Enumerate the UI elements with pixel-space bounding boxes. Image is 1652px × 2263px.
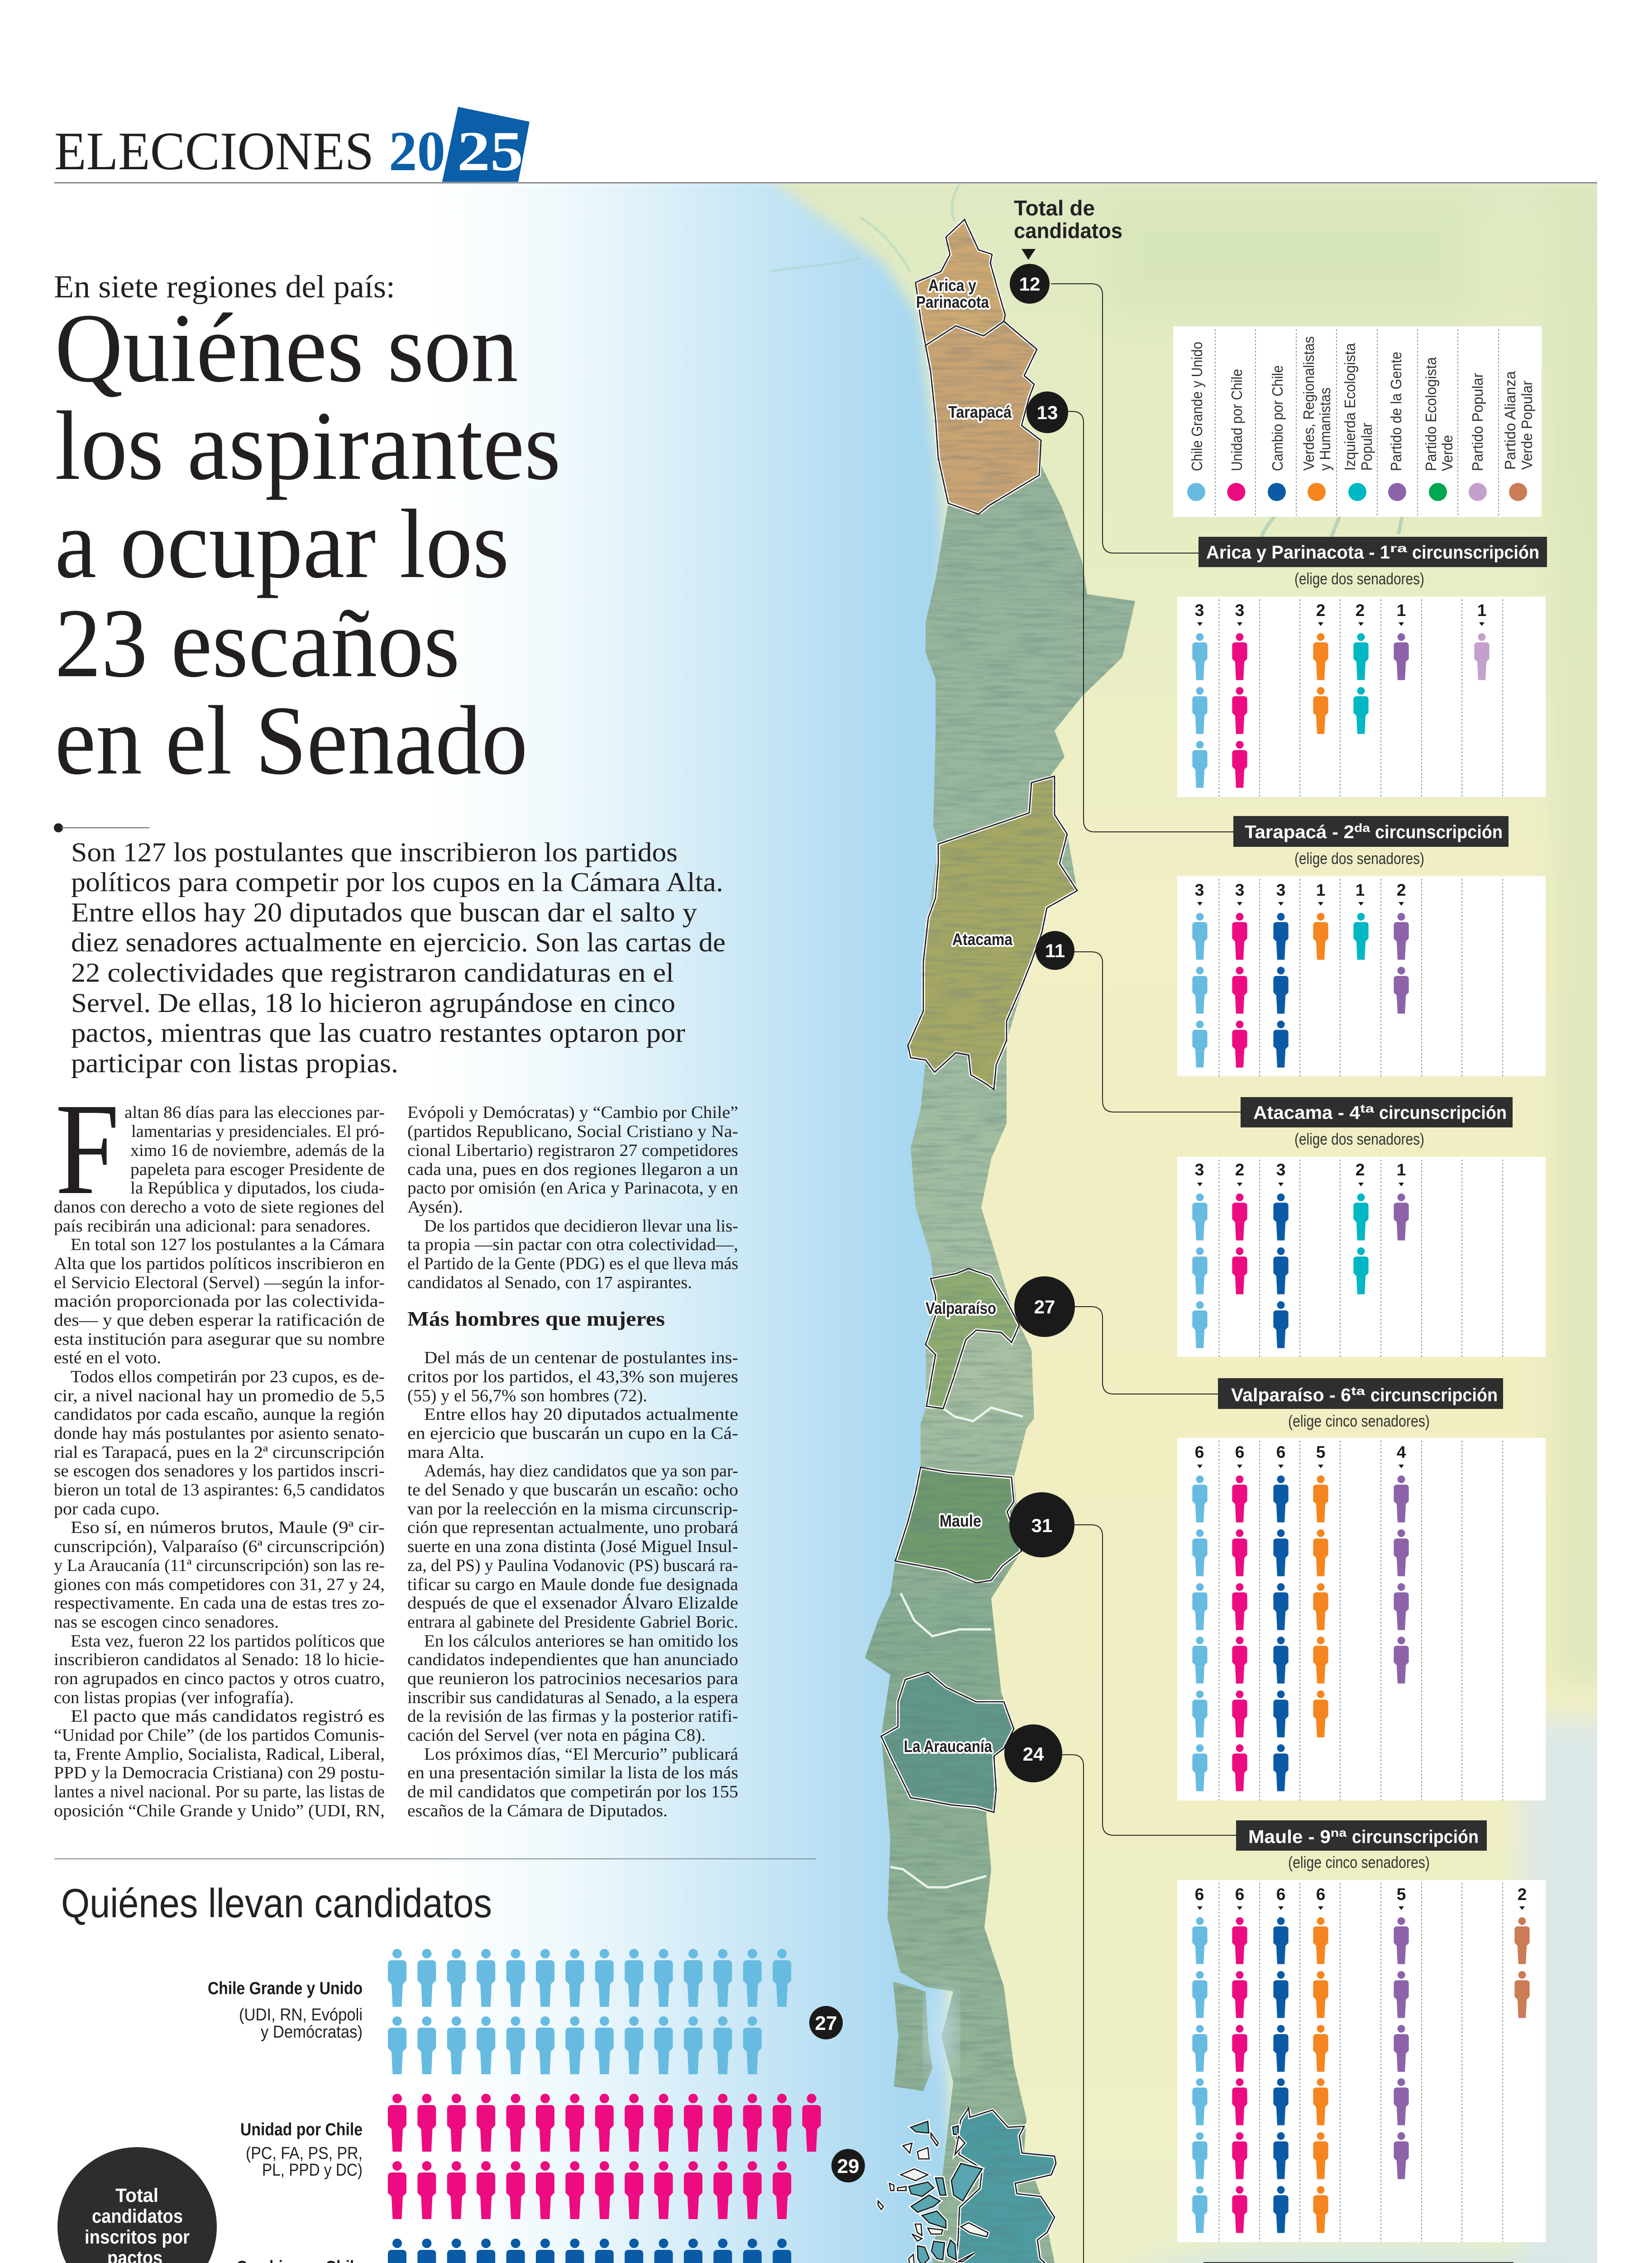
body text column 2: tificar su cargo en Maule donde fue designada — [407, 1575, 738, 1594]
title: 23 escaños — [55, 589, 460, 698]
body text column 2: Entre ellos hay 20 diputados actualmente — [424, 1405, 738, 1424]
body text column 2: critos por los partidos, el 43,3% son mujeres — [407, 1367, 738, 1386]
header: Atacama 4ta circunscripción — [1241, 1097, 1513, 1127]
body text column 2: entrara al gabinete del Presidente Gabriel Boric. — [407, 1613, 738, 1632]
badge: 11 Atacama — [1036, 931, 1074, 970]
body text column 1: esté en el voto. — [54, 1348, 161, 1367]
panel: Maule candidates: 6 — [1235, 1885, 1244, 1904]
pact label: Unidad por Chile: Unidad por Chile — [240, 2120, 363, 2139]
drop cap: F — [55, 1076, 119, 1222]
badge: 11 Atacama: 11 — [1045, 940, 1065, 961]
region name labels: Valparaíso — [926, 1299, 996, 1318]
body text column 1: inscribieron candidatos al Senado: 18 lo hicie- — [54, 1650, 385, 1669]
pictogram: Chile Grande y Unido 27 — [388, 1949, 791, 2074]
body text column 2: candidatos independientes que han anunciado — [407, 1650, 738, 1669]
header: Tarapacá 2da circunscripción — [1233, 816, 1509, 847]
label: Total de candidatos with arrow: Total de — [1014, 196, 1095, 220]
panel: Tarapacá candidates: 1 — [1316, 881, 1325, 899]
body text column 1: Eso sí, en números brutos, Maule (9ª cir- — [71, 1518, 385, 1537]
map: Chile mainland silhouette — [865, 462, 1239, 2263]
header: Tarapacá 2da circunscripción: circunscripción — [1375, 821, 1503, 842]
intro paragraph: políticos para competir por los cupos en la Cámara Alta. — [71, 867, 723, 897]
body text column 1: respectivamente. En cada una de estas tres zo- — [54, 1594, 385, 1613]
header: La Araucanía 11a circunscripción — [1203, 2262, 1514, 2263]
badge: 31 Maule — [1009, 1492, 1074, 1557]
region name labels: Maule — [940, 1512, 981, 1530]
region name labels: Arica y — [928, 276, 976, 295]
note: elige dos senadores: (elige dos senadores) — [1294, 569, 1424, 588]
intro paragraph: Son 127 los postulantes que inscribieron los partidos — [71, 837, 678, 867]
header: Atacama 4ta circunscripción: circunscripción — [1379, 1102, 1507, 1123]
body text column 1: papeleta para escoger Presidente de — [130, 1160, 385, 1179]
body text column 2: Los próximos días, “El Mercurio” publicará — [424, 1745, 738, 1764]
badge: 27 Valparaíso: 27 — [1034, 1296, 1055, 1318]
body text column 1: país recibirán una adicional: para senadores. — [54, 1217, 371, 1236]
map: fjords, lakes and internal boundaries — [890, 1408, 1223, 2263]
region: Aysén with archipelago — [877, 2108, 1056, 2263]
body text column 2: mara Alta. — [407, 1443, 484, 1462]
panel: Atacama candidates: 2 — [1356, 1160, 1365, 1179]
region name labels: La Araucanía — [904, 1737, 992, 1756]
region name labels: Atacama — [952, 930, 1012, 949]
body text column 1: nas se escogen cinco senadores. — [54, 1613, 279, 1632]
body text column 2: (55) y el 56,7% son hombres (72). — [407, 1386, 647, 1405]
region name labels: Parinacota — [916, 293, 989, 311]
body text column 1 — [54, 1103, 385, 1820]
body text column 1: mación proporcionada por las colectivida- — [54, 1292, 385, 1311]
body text column 2 — [407, 1103, 738, 1820]
body text column 1: esta institución para asegurar que su nombre — [54, 1330, 385, 1349]
body text column 2: en ejercicio que buscarán un cupo en la Cá- — [407, 1424, 738, 1443]
body text column 2: de mil candidatos que competirán por los 155 — [407, 1782, 738, 1801]
body text column 2: después de que el exsenador Álvaro Elizalde — [407, 1594, 738, 1613]
body text column 1: ron agrupados en cinco pactos y otros cuatro, — [54, 1669, 385, 1688]
body text column 1: el Servicio Electoral (Servel) —según la infor- — [54, 1273, 385, 1292]
intro paragraph: participar con listas propias. — [71, 1048, 398, 1078]
panel: Valparaíso candidates — [1177, 1438, 1546, 1800]
panel: Maule candidates: 6 — [1195, 1885, 1204, 1904]
body text column 2: Más hombres que mujeres — [407, 1308, 665, 1330]
legend panel: parties and colours: Unidad por Chile — [1228, 369, 1245, 471]
pact label: Chile Grande y Unido: Chile Grande y Unido — [208, 1979, 363, 1998]
badge: 29: 29 — [837, 2155, 859, 2177]
header: Maule 9na circunscripción — [1236, 1820, 1487, 1851]
body text column 1: cunscripción), Valparaíso (6ª circunscripción) — [54, 1537, 385, 1556]
body text column 2: el Partido de la Gente (PDG) es el que lleva más — [407, 1254, 738, 1273]
panel: Maule candidates: 6 — [1276, 1885, 1285, 1904]
body text column 1: con listas propias (ver infografía). — [54, 1688, 294, 1707]
kicker: En siete regiones del país: — [54, 269, 395, 305]
title — [55, 294, 561, 795]
body text column 1: rial es Tarapacá, pues en la 2ª circunscripción — [54, 1443, 385, 1462]
header: Arica y Parinacota 1ra circunscripción: ra — [1390, 541, 1408, 555]
header: Atacama 4ta circunscripción: Atacama - 4 — [1253, 1102, 1360, 1123]
body text column 2: pacto por omisión (en Arica y Parinacota, y en — [407, 1179, 738, 1198]
body text column 1: la República y diputados, los ciuda- — [130, 1179, 385, 1198]
pictogram: Unidad por Chile 29 — [388, 2094, 821, 2219]
panel: Tarapacá candidates — [1177, 876, 1546, 1076]
panel: Maule candidates: 2 — [1518, 1885, 1527, 1904]
body text column 1: “Unidad por Chile” (de los partidos Comunis- — [54, 1726, 385, 1745]
panel: Valparaíso candidates: 5 — [1316, 1443, 1325, 1461]
note: elige cinco senadores: (elige cinco senadores) — [1288, 1412, 1430, 1430]
circle: total candidatos inscritos por pactos: Total — [115, 2185, 158, 2206]
panel: Atacama candidates: 3 — [1195, 1160, 1204, 1179]
header: Elecciones 2025: 25 — [457, 120, 523, 183]
legend panel: parties and colours: Verdes, Regionalistas — [1300, 336, 1317, 471]
body text column 2: escaños de la Cámara de Diputados. — [407, 1801, 668, 1820]
pact label: Chile Grande y Unido: (UDI, RN, Evópoli — [239, 2005, 363, 2024]
body text column 1: bieron un total de 13 aspirantes: 6,5 candidatos — [54, 1480, 385, 1499]
header: Elecciones 2025: ELECCIONES — [54, 121, 374, 181]
legend panel: parties and colours: Izquierda Ecologista — [1342, 343, 1358, 471]
panel: Tarapacá candidates: 3 — [1276, 881, 1285, 899]
badge: 31 Maule: 31 — [1031, 1515, 1052, 1536]
region: Valparaíso — [926, 1269, 1019, 1408]
panel: Arica y Parinacota candidates: 2 — [1356, 601, 1365, 620]
circle: total candidatos inscritos por pactos: inscritos por — [85, 2226, 190, 2248]
badge: 12 Arica — [1010, 264, 1050, 304]
title: los aspirantes — [55, 391, 561, 501]
note: elige dos senadores: (elige dos senadores) — [1294, 849, 1424, 868]
panel: Atacama candidates — [1177, 1157, 1546, 1357]
body text column 1: lamentarias y presidenciales. El pró- — [131, 1122, 385, 1141]
intro paragraph — [71, 837, 726, 1078]
badge: 27: 27 — [815, 2012, 837, 2034]
body text column 1: danos con derecho a voto de siete regiones del — [54, 1198, 385, 1217]
panel: Arica y Parinacota candidates — [1177, 597, 1546, 797]
header: Arica y Parinacota 1ra circunscripción — [1198, 537, 1547, 567]
header: Atacama 4ta circunscripción: ta — [1360, 1102, 1375, 1115]
panel: Valparaíso candidates: 6 — [1235, 1443, 1244, 1461]
body text column 1: ta, Frente Amplio, Socialista, Radical, Liberal, — [54, 1745, 385, 1764]
header: Valparaíso 6ta circunscripción: circunscripción — [1370, 1385, 1498, 1405]
legend panel: parties and colours: Verde Popular — [1518, 381, 1535, 470]
panel: Atacama candidates: 3 — [1276, 1160, 1285, 1179]
panel: Arica y Parinacota candidates: 3 — [1235, 601, 1244, 620]
header: Arica y Parinacota 1ra circunscripción: Arica y Parinacota - 1 — [1206, 542, 1390, 563]
body text column 2: cional Libertario) registraron 27 competidores — [407, 1141, 738, 1160]
panel: Valparaíso candidates: 6 — [1195, 1443, 1204, 1461]
panel: Valparaíso candidates: 6 — [1276, 1443, 1285, 1461]
legend panel: parties and colours: Partido Popular — [1469, 373, 1486, 471]
body text column 1: lantes a nivel nacional. Por su parte, las listas de — [54, 1782, 385, 1801]
panel: Tarapacá candidates: 1 — [1356, 881, 1365, 899]
header: Maule 9na circunscripción: Maule - 9 — [1248, 1826, 1331, 1847]
header: Valparaíso 6ta circunscripción — [1218, 1378, 1503, 1409]
badge: 29 — [831, 2149, 865, 2182]
note: elige dos senadores: (elige dos senadores) — [1294, 1130, 1424, 1148]
body text column 2: suerte en una zona distinta (José Miguel Insul- — [407, 1537, 738, 1556]
body text column 1: altan 86 días para las elecciones par- — [124, 1103, 385, 1122]
panel: Arica y Parinacota candidates: 2 — [1316, 601, 1325, 620]
panel: Arica y Parinacota candidates: 1 — [1477, 601, 1486, 620]
body text column 2: candidatos al Senado, con 17 aspirantes. — [407, 1273, 692, 1292]
body text column 1: Todos ellos competirán por 23 cupos, es de- — [71, 1367, 385, 1386]
legend panel: parties and colours: Cambio por Chile — [1269, 365, 1286, 471]
badge: 12 Arica: 12 — [1019, 273, 1040, 295]
circle: total candidatos inscritos por pactos: candidatos — [92, 2206, 183, 2227]
intro paragraph: pactos, mientras que las cuatro restantes optaron por — [71, 1018, 685, 1048]
panel: Tarapacá candidates: 2 — [1397, 881, 1406, 899]
region name labels — [904, 276, 1017, 2263]
header: Tarapacá 2da circunscripción: Tarapacá - 2 — [1245, 821, 1354, 842]
body text column 2: inscribir sus candidaturas al Senado, a la espera — [407, 1688, 738, 1707]
body text column 1: des— y que deben esperar la ratificación de — [54, 1311, 385, 1330]
body text column 2: Además, hay diez candidatos que ya son par- — [424, 1461, 738, 1480]
heading: Quiénes llevan candidatos: Quiénes llevan candidatos — [61, 1881, 492, 1926]
body text column 1: se escogen dos senadores y los partidos inscri- — [54, 1461, 385, 1480]
legend panel: parties and colours: y Humanistas — [1317, 387, 1333, 471]
title: a ocupar los — [55, 490, 509, 599]
region: Tarapacá — [926, 321, 1041, 514]
pact label: Chile Grande y Unido: y Demócratas) — [261, 2023, 363, 2042]
badge: 24 La Araucanía: 24 — [1023, 1743, 1044, 1765]
badge: 24 La Araucanía — [1004, 1724, 1062, 1782]
header: Maule 9na circunscripción: na — [1331, 1826, 1347, 1839]
leader lines from regions to panels — [1051, 284, 1241, 2263]
body text column 2: Del más de un centenar de postulantes ins- — [424, 1348, 738, 1367]
legend panel: parties and colours — [1173, 326, 1542, 517]
body text column 2: za, del PS) y Paulina Vodanovic (PS) buscará ra- — [407, 1556, 738, 1575]
title: Quiénes son — [55, 294, 518, 403]
body text column 1: ximo 16 de noviembre, además de la — [130, 1141, 385, 1160]
panel: Atacama candidates: 2 — [1235, 1160, 1244, 1179]
panel: Tarapacá candidates: 3 — [1235, 881, 1244, 899]
header: Valparaíso 6ta circunscripción: Valparaíso - 6 — [1231, 1385, 1351, 1405]
legend panel: parties and colours: Partido Alianza — [1502, 371, 1518, 470]
region: Arica y Parinacota — [916, 220, 1005, 345]
title: en el Senado — [55, 686, 528, 795]
body text column 1: Alta que los partidos políticos inscribieron en — [54, 1254, 385, 1273]
header: Arica y Parinacota 1ra circunscripción: circunscripción — [1412, 542, 1539, 563]
body text column 1: giones con más competidores con 31, 27 y 24, — [54, 1575, 385, 1594]
body text column 2: de la revisión de las firmas y la posterior ratifi- — [407, 1707, 738, 1726]
panel: Maule candidates — [1177, 1880, 1546, 2242]
legend panel: parties and colours: Chile Grande y Unido — [1189, 342, 1205, 471]
map: watercolor background of Chile — [498, 184, 1597, 2263]
pact label: Unidad por Chile: PL, PPD y DC) — [262, 2161, 363, 2180]
label: Total de candidatos with arrow: candidatos — [1014, 219, 1122, 243]
intro paragraph: Servel. De ellas, 18 lo hicieron agrupándose en cinco — [71, 988, 675, 1018]
panel: Maule candidates: 6 — [1316, 1885, 1325, 1904]
legend panel: parties and colours: Partido Ecologista — [1423, 357, 1439, 471]
panel: Atacama candidates: 1 — [1397, 1160, 1406, 1179]
body text column 1: cir, a nivel nacional hay un promedio de 5,5 — [54, 1386, 385, 1405]
label: Total de candidatos with arrow — [1014, 196, 1122, 260]
header: Elecciones 2025 — [54, 107, 1597, 183]
pact label: Unidad por Chile: (PC, FA, PS, PR, — [246, 2144, 363, 2163]
header: Valparaíso 6ta circunscripción: ta — [1351, 1384, 1366, 1398]
pictogram: Cambio por Chile 27 — [388, 2239, 791, 2263]
pact label: Chile Grande y Unido — [208, 1979, 363, 2042]
legend panel: parties and colours: Partido de la Gente — [1388, 352, 1404, 471]
intro marker — [54, 823, 149, 832]
circle: total candidatos inscritos por pactos — [57, 2147, 217, 2263]
region: La Araucanía — [881, 1672, 1014, 1812]
body text column 2: ta propia —sin pactar con otra colectividad—, — [407, 1235, 738, 1254]
body text column 1: oposición “Chile Grande y Unido” (UDI, RN, — [54, 1801, 385, 1820]
body text column 1: El pacto que más candidatos registró es — [71, 1707, 385, 1726]
panel: Arica y Parinacota candidates: 3 — [1195, 601, 1204, 620]
body text column 1: y La Araucanía (11ª circunscripción) son las re- — [54, 1556, 385, 1575]
body text column 2: en una presentación similar la lista de los más — [407, 1763, 738, 1782]
body text column 2: cada una, pues en dos regiones llegaron a un — [407, 1160, 738, 1179]
intro paragraph: 22 colectividades que registraron candidaturas en el — [71, 958, 674, 988]
header: Tarapacá 2da circunscripción: da — [1354, 821, 1370, 835]
body text column 1: En total son 127 los postulantes a la Cámara — [71, 1235, 385, 1254]
body text column 2: te del Senado y que buscarán un escaño: ocho — [407, 1480, 738, 1499]
pact label: Unidad por Chile — [240, 2120, 363, 2180]
body text column 2: que reunieron los patrocinios necesarios para — [407, 1669, 738, 1688]
intro paragraph: Entre ellos hay 20 diputados que buscan dar el salto y — [71, 898, 697, 927]
body text column 2: Evópoli y Demócratas) y “Cambio por Chile” — [407, 1103, 738, 1122]
badge: 27 Valparaíso — [1014, 1276, 1075, 1337]
body text column 2: (partidos Republicano, Social Cristiano y Na- — [407, 1122, 738, 1141]
panel: Arica y Parinacota candidates: 1 — [1397, 601, 1406, 620]
badge: 27 — [809, 2006, 843, 2039]
intro paragraph: diez senadores actualmente en ejercicio. Son las cartas de — [71, 927, 726, 957]
body text column 2: van por la reelección en la misma circunscrip- — [407, 1499, 738, 1518]
body text column 1: candidatos por cada escaño, aunque la región — [54, 1405, 385, 1424]
legend panel: parties and colours: Verde — [1439, 435, 1456, 471]
panel: Maule candidates: 5 — [1397, 1885, 1406, 1904]
panel: Valparaíso candidates: 4 — [1397, 1443, 1406, 1461]
panel: Tarapacá candidates: 3 — [1195, 881, 1204, 899]
body text column 2: cación del Servel (ver nota en página C8). — [407, 1726, 706, 1745]
body text column 1: por cada cupo. — [54, 1499, 160, 1518]
header: Elecciones 2025: 20 — [389, 120, 445, 183]
legend panel: parties and colours: Popular — [1358, 423, 1375, 471]
body text column 2: En los cálculos anteriores se han omitido los — [424, 1632, 738, 1651]
body text column 2: Aysén). — [407, 1198, 463, 1217]
header: Maule 9na circunscripción: circunscripción — [1352, 1826, 1479, 1847]
region name labels: Tarapacá — [948, 403, 1012, 421]
region: Maule — [895, 1467, 1022, 1583]
badge: 13 Tarapacá — [1027, 391, 1068, 433]
body text column 1: donde hay más postulantes por asiento senato- — [54, 1424, 385, 1443]
region: Atacama — [908, 776, 1077, 1089]
body text column 2: ción que representan actualmente, uno probará — [407, 1518, 738, 1537]
badge: 13 Tarapacá: 13 — [1037, 402, 1058, 423]
body text column 1: Esta vez, fueron 22 los partidos políticos que — [71, 1632, 385, 1651]
note: elige cinco senadores: (elige cinco senadores) — [1288, 1853, 1430, 1872]
body text column 1: PPD y la Democracia Cristiana) con 29 postu- — [54, 1763, 385, 1782]
body text column 2: De los partidos que decidieron llevar una lis- — [424, 1217, 738, 1236]
